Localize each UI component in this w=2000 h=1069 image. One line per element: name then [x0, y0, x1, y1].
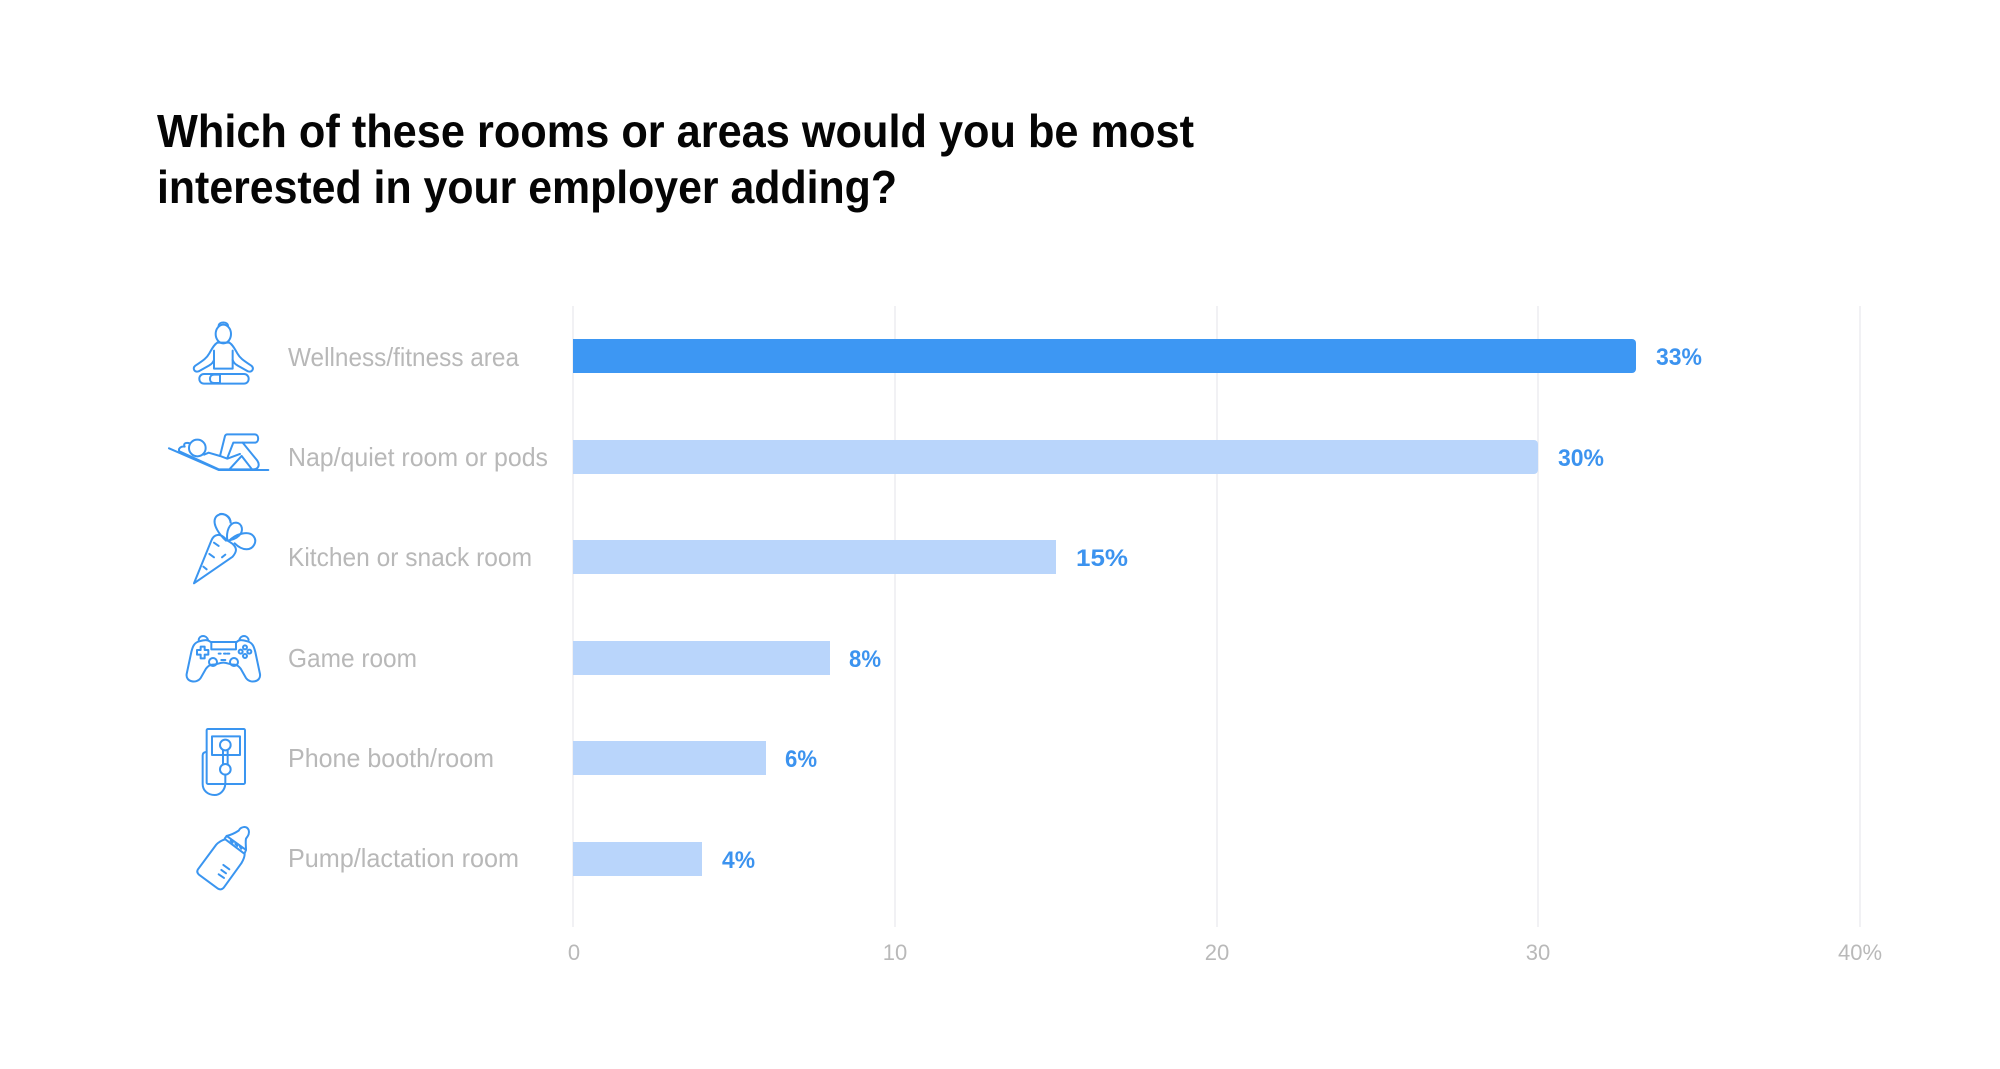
value: 6%	[785, 746, 817, 773]
x axis labels: 30	[1526, 940, 1550, 965]
row: pump/lactation room	[197, 827, 755, 889]
title	[157, 105, 1194, 213]
row: phone booth/room	[203, 729, 817, 795]
label: Pump/lactation room	[288, 843, 519, 873]
row: wellness/fitness area	[194, 322, 1702, 384]
bar: 30%	[573, 440, 1538, 474]
title: Which of these rooms or areas would you be most	[157, 105, 1194, 157]
label: Wellness/fitness area	[288, 342, 519, 372]
value: 15%	[1076, 545, 1128, 572]
x axis labels: 0	[568, 940, 580, 965]
bar: 8%	[573, 641, 830, 675]
x axis labels: 10	[883, 940, 907, 965]
row: kitchen or snack room	[194, 514, 1128, 583]
horizontal bar chart	[169, 322, 1702, 889]
x axis labels: 40%	[1838, 940, 1882, 965]
label: Game room	[288, 643, 417, 673]
bar: 6%	[573, 741, 766, 775]
x axis labels: 20	[1205, 940, 1229, 965]
icon: wall phone	[203, 729, 245, 795]
row: game room	[187, 636, 881, 681]
icon: person resting	[169, 434, 268, 470]
label: Phone booth/room	[288, 743, 494, 773]
icon: game controller	[187, 636, 260, 681]
x axis labels	[568, 940, 1882, 965]
value: 4%	[722, 847, 755, 874]
label: Nap/quiet room or pods	[288, 442, 548, 472]
value: 8%	[849, 646, 881, 673]
bar: 4%	[573, 842, 702, 876]
icon: meditating person	[194, 322, 253, 384]
icon: carrot	[194, 514, 255, 583]
bar: 33%	[573, 339, 1636, 373]
row: nap/quiet room or pods	[169, 434, 1604, 474]
label: Kitchen or snack room	[288, 542, 532, 572]
title: interested in your employer adding?	[157, 161, 897, 213]
value: 30%	[1558, 445, 1604, 472]
value: 33%	[1656, 344, 1702, 371]
icon: baby bottle	[197, 827, 249, 889]
bar: 15%	[573, 540, 1056, 574]
